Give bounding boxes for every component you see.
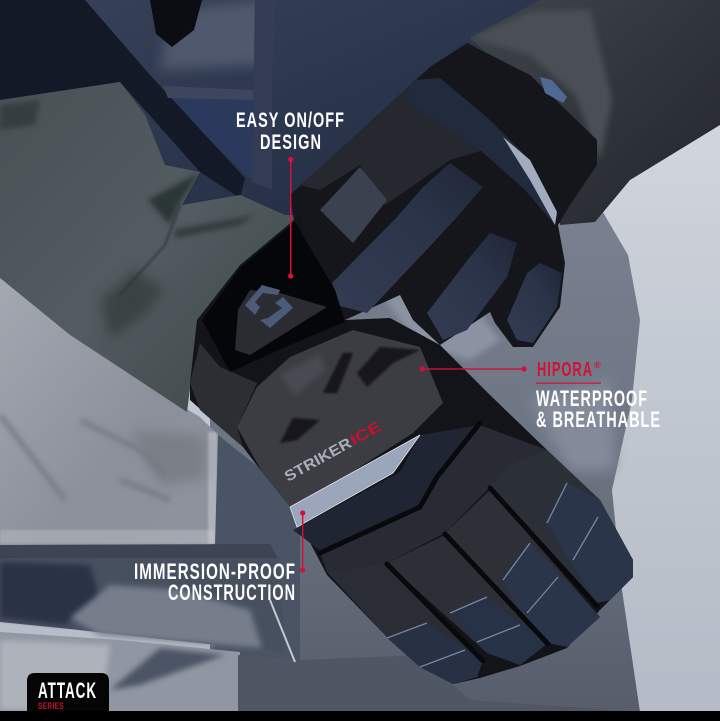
finger 1 tip — [547, 483, 633, 603]
lower pocket shadow — [110, 648, 225, 690]
placket highlight line — [270, 600, 295, 662]
badge subtitle: SERIES — [38, 701, 64, 711]
brand wordmark: STRIKER — [282, 435, 355, 485]
cuff opening shadow — [202, 222, 345, 372]
callout: easy on/off design — [236, 109, 345, 279]
bottom black band — [0, 711, 720, 721]
cuff logo — [245, 285, 293, 328]
finger stitching — [387, 483, 598, 667]
finger 3 — [387, 535, 548, 665]
callout: hipora waterproof and breathable — [419, 359, 661, 432]
lower glove body — [190, 215, 633, 684]
chest pocket panel — [163, 88, 255, 180]
waist band dark left — [0, 562, 100, 625]
lower pocket light patch — [0, 640, 110, 710]
finger 4 — [327, 563, 483, 684]
left jacket sleeve — [0, 82, 300, 412]
heading: easy on/off design: DESIGN — [260, 131, 322, 154]
finger pad 3 — [507, 263, 562, 343]
heading: immersion-proof construction — [134, 559, 296, 605]
finger 4 tip — [387, 623, 483, 684]
sleeve top shadow — [0, 100, 40, 130]
cuff side panel — [190, 343, 257, 447]
jacket panel shadow — [130, 430, 205, 485]
lower wrist panel — [293, 425, 480, 558]
chest seam column — [252, 0, 272, 190]
finger 3 tip — [450, 597, 548, 665]
sleeve lower fold — [100, 270, 165, 340]
finger gaps — [320, 423, 597, 661]
chest pocket flap — [163, 86, 255, 100]
cuff top patch — [235, 290, 327, 355]
callout: immersion-proof construction — [134, 510, 305, 605]
chest upper area — [0, 0, 560, 230]
sleeve lighter section — [472, 10, 612, 160]
right arm sleeve — [470, 0, 720, 225]
brand name: hipora: HIPORA — [537, 359, 593, 381]
heading: immersion-proof construction: IMMERSION-PROOF — [134, 559, 296, 584]
leader line — [300, 510, 305, 573]
upper glove — [290, 43, 597, 347]
jacket torso right side — [210, 190, 640, 712]
heading: easy on/off design — [236, 109, 345, 154]
text: waterproof and breathable: WATERPROOF — [536, 386, 648, 411]
badge background — [27, 673, 109, 711]
badge: attack series — [27, 673, 109, 711]
upper glove band — [405, 78, 557, 225]
palm root panel — [320, 425, 547, 572]
belt strip under panel — [0, 544, 280, 562]
back of hand dark folds — [280, 347, 420, 443]
finger 1 — [490, 450, 633, 603]
brand wordmark: ICE — [347, 418, 384, 449]
chest grey highlight — [160, 0, 265, 70]
finger pad 2 — [427, 233, 517, 340]
divider rule — [536, 382, 601, 384]
lower jacket dark — [238, 655, 640, 712]
leader line — [288, 157, 293, 279]
thumb fold shadow — [175, 215, 255, 238]
leader line — [419, 366, 527, 372]
finger pad 1 — [332, 163, 483, 313]
lower-left light jacket panel — [0, 278, 218, 546]
upper glove back patch — [320, 167, 387, 243]
jacket panel lit hem — [0, 530, 215, 544]
chest dark shadow wedge — [0, 0, 245, 198]
finger 2 tip — [503, 543, 600, 647]
sleeve crease — [120, 205, 180, 295]
text: waterproof and breathable — [536, 386, 661, 432]
jacket panel right edge — [208, 432, 217, 544]
upper glove reflective strip — [503, 137, 557, 225]
back of hand highlight — [280, 355, 325, 395]
heading: immersion-proof construction: CONSTRUCTION — [168, 580, 296, 605]
sleeve fold shadow — [148, 172, 200, 225]
upper glove body — [290, 43, 597, 347]
brand wordmark — [282, 418, 384, 485]
waist band — [0, 558, 285, 652]
light panel between gloves — [385, 250, 500, 360]
lower pocket — [0, 632, 240, 712]
front placket — [215, 435, 300, 660]
registered mark: ® — [594, 360, 601, 370]
waist band light patch — [70, 585, 262, 648]
reflective strip — [290, 435, 420, 527]
back of hand panel — [237, 330, 443, 510]
cuff logo on band — [540, 77, 567, 103]
finger 2 — [445, 490, 600, 647]
jacket fold shading — [0, 415, 170, 500]
chest buckle icon — [150, 0, 202, 47]
lower glove — [190, 215, 633, 684]
upper glove knuckles — [300, 82, 500, 205]
heading: easy on/off design: EASY ON/OFF — [236, 109, 345, 132]
badge title: ATTACK — [38, 678, 97, 703]
light patch right of hand — [530, 380, 615, 470]
